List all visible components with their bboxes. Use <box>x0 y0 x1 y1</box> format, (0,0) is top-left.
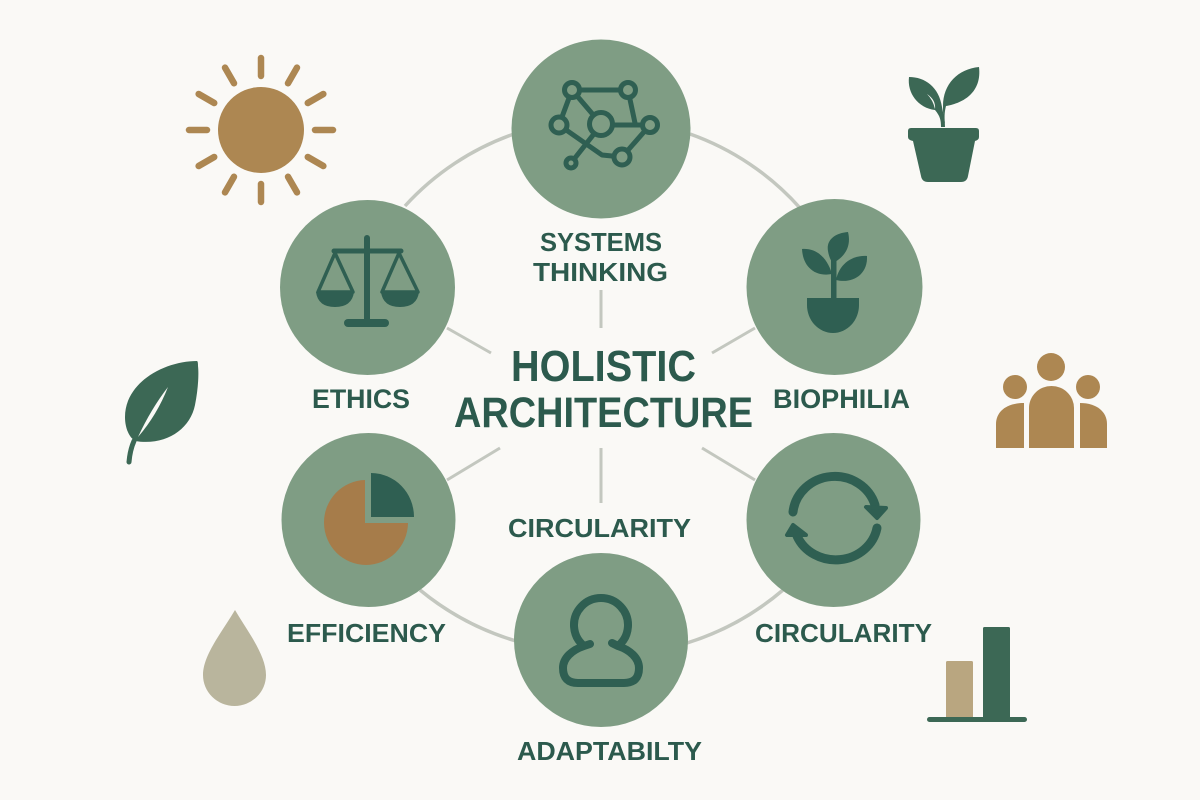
label: circularity right: CIRCULARITY <box>755 618 932 648</box>
label: systems thinking: SYSTEMS <box>540 227 662 257</box>
node: adaptability <box>514 553 702 766</box>
label: circularity centre: CIRCULARITY <box>508 513 691 543</box>
icon: leaf <box>125 361 198 462</box>
node: circularity <box>746 433 932 648</box>
node: ethics <box>280 200 455 414</box>
icon: people group <box>996 353 1107 448</box>
label: systems thinking: THINKING <box>533 257 668 287</box>
icon: water drop <box>203 610 266 706</box>
icon: network <box>551 82 658 168</box>
icon: sprout in bowl <box>802 232 867 333</box>
connector ring <box>405 134 800 643</box>
icon: sun <box>189 58 333 202</box>
icon: bar chart <box>927 627 1027 722</box>
icon: potted plant <box>908 67 979 182</box>
icon: person outline <box>563 598 639 683</box>
label: adaptability: ADAPTABILTY <box>517 736 702 766</box>
label: biophilia: BIOPHILIA <box>773 384 910 414</box>
icon: pie chart <box>324 473 414 565</box>
icon: scales <box>316 238 419 323</box>
node: systems thinking <box>512 40 690 287</box>
node: efficiency <box>282 433 456 648</box>
icon: circular arrows <box>787 476 886 560</box>
label: efficiency: EFFICIENCY <box>287 618 446 648</box>
title: Holistic Architecture: ARCHITECTURE <box>454 389 753 437</box>
title: Holistic Architecture: HOLISTIC <box>511 342 696 391</box>
node: biophilia <box>746 199 922 414</box>
label: systems thinking <box>533 227 668 287</box>
title: Holistic Architecture <box>454 342 753 437</box>
spokes from centre <box>447 290 755 503</box>
label: ethics: ETHICS <box>312 384 410 414</box>
